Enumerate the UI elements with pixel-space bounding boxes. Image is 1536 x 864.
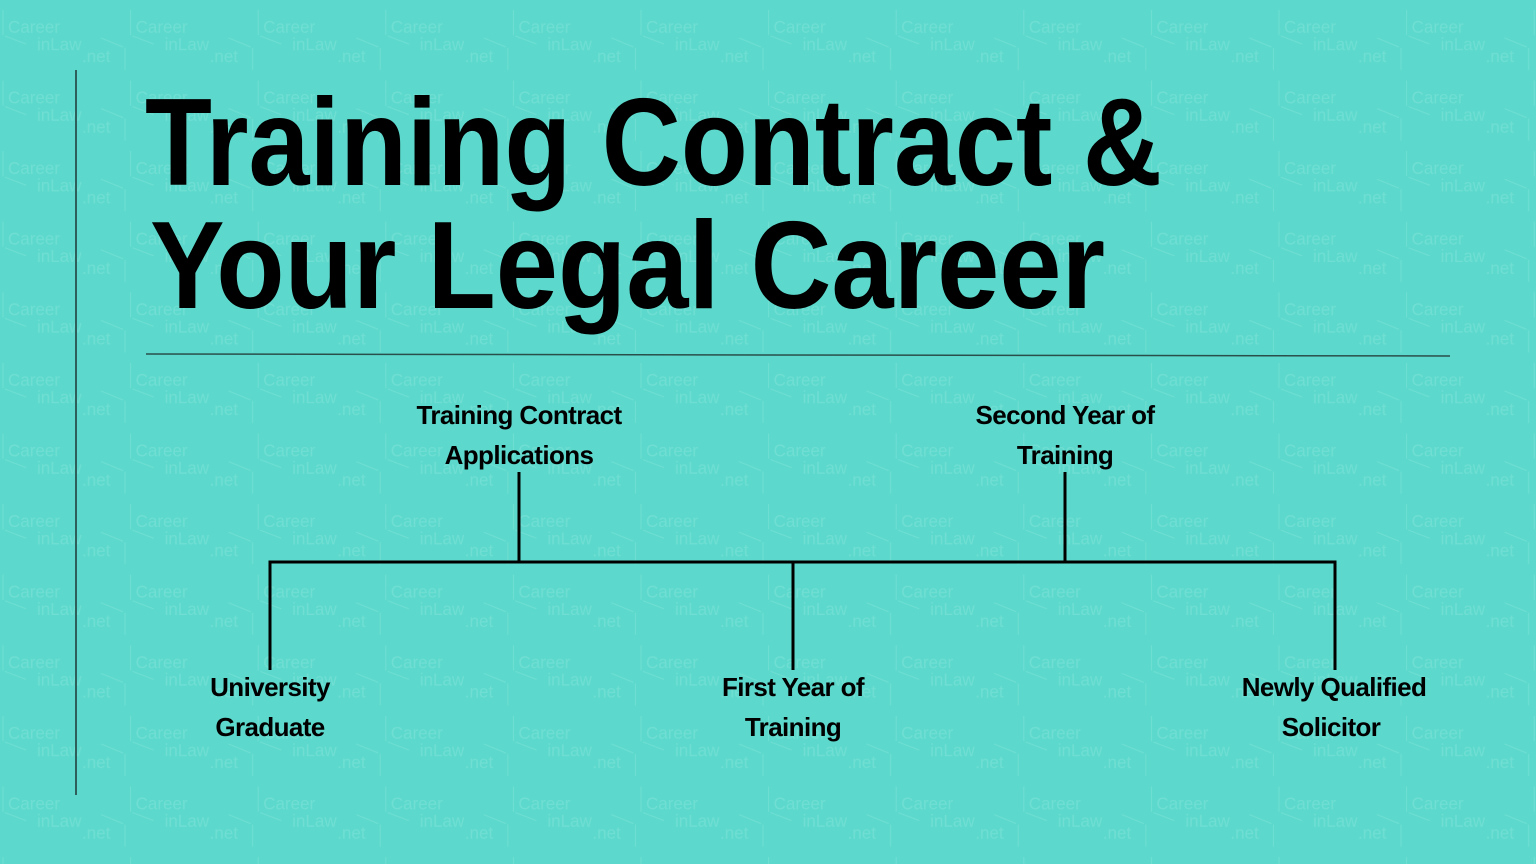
label: second year of training: Second Year of — [976, 400, 1154, 430]
label: university graduate: University — [210, 672, 330, 702]
labels — [210, 400, 1426, 742]
label: newly qualified solicitor: Newly Qualified — [1242, 672, 1426, 702]
label: newly qualified solicitor: Solicitor — [1282, 712, 1381, 742]
title: Your Legal Career — [150, 197, 1105, 335]
label: training contract applications: Applications — [445, 440, 594, 470]
label: second year of training: Training — [1017, 440, 1113, 470]
label: training contract applications: Training Contract — [416, 400, 622, 430]
label: first year of training: Training — [745, 712, 841, 742]
title — [145, 74, 1162, 335]
timeline tree connectors — [270, 472, 1335, 670]
label: first year of training: First Year of — [722, 672, 864, 702]
label: university graduate: Graduate — [215, 712, 325, 742]
title: Training Contract & — [145, 74, 1162, 212]
